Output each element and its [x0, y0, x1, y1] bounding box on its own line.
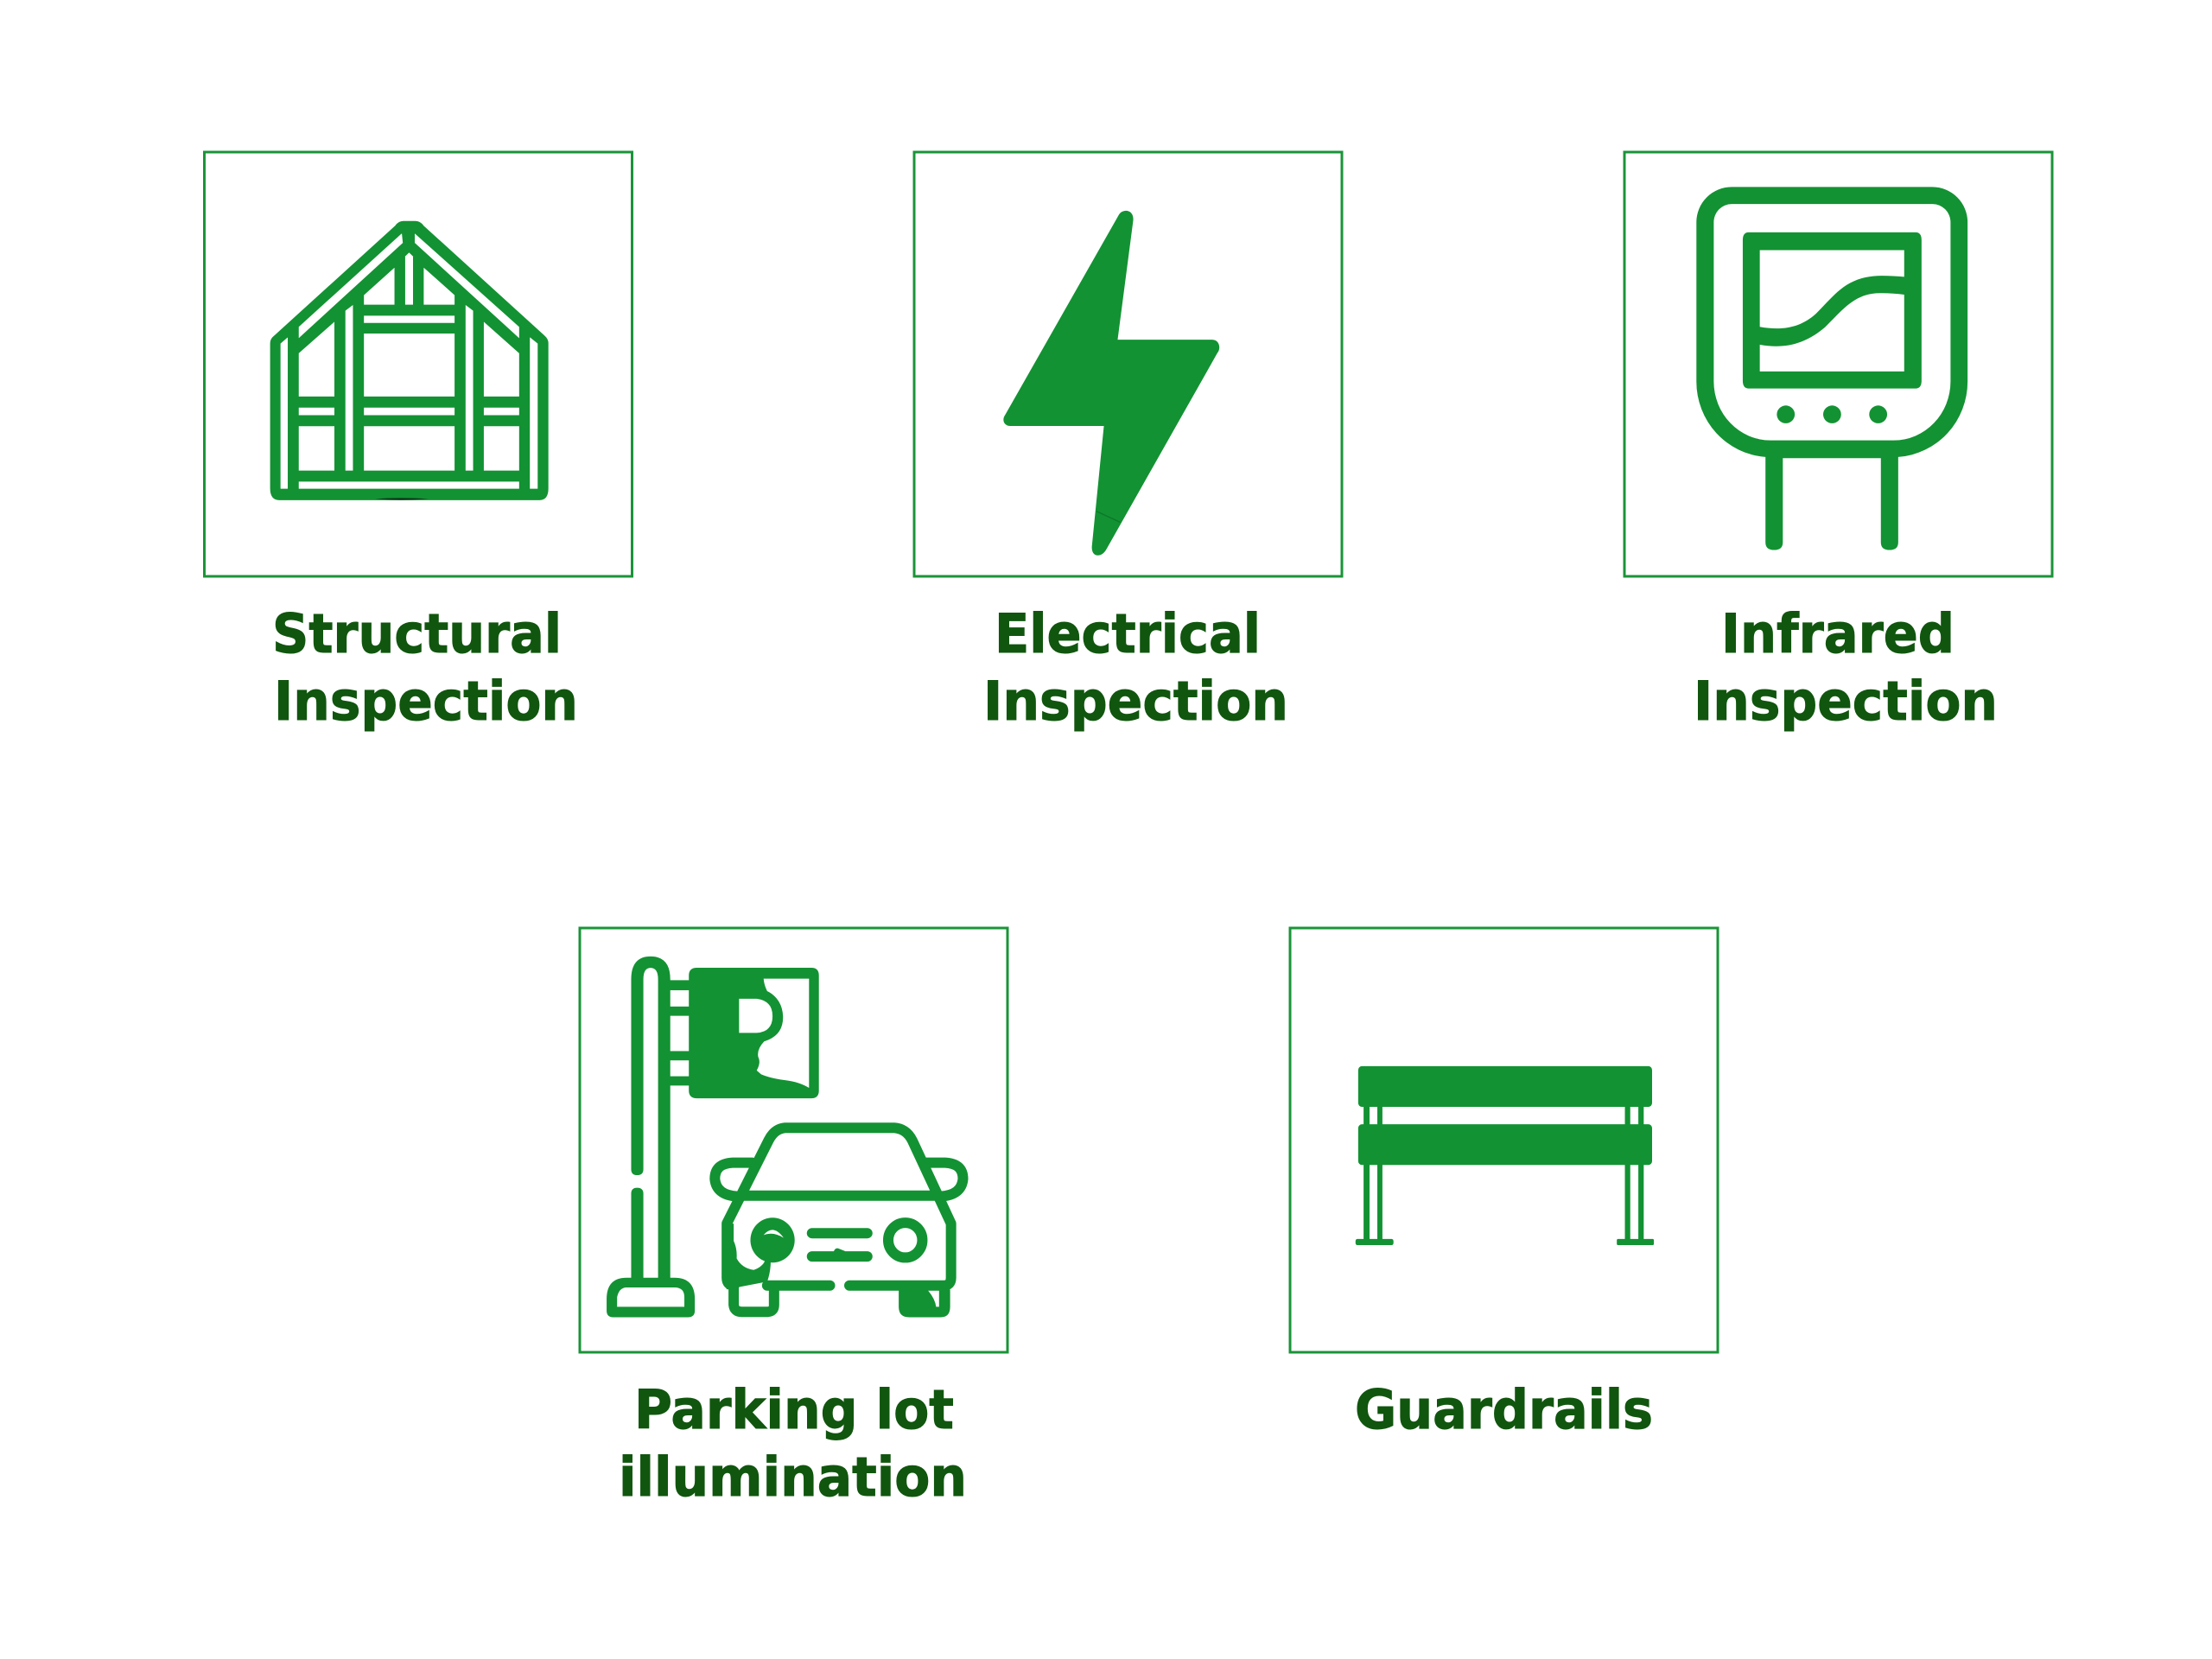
label: Parking lot illumination	[619, 1378, 967, 1509]
label: Infrared Inspection: Inspection	[1694, 670, 1998, 733]
label: Electrical Inspection	[983, 602, 1288, 733]
panel: structural inspection	[204, 152, 632, 733]
icon: parking sign and car	[607, 957, 963, 1317]
panel: infrared inspection	[1624, 152, 2052, 733]
panel: guardrails	[1290, 928, 1718, 1441]
panel: parking lot illumination	[580, 928, 1007, 1509]
label: Structural Inspection: Structural	[272, 602, 562, 665]
label: Structural Inspection	[272, 602, 578, 733]
label: Electrical Inspection: Electrical	[995, 602, 1261, 665]
frame: infrared	[1624, 152, 2052, 576]
label: Structural Inspection: Inspection	[274, 670, 578, 733]
label: Infrared Inspection	[1694, 602, 1998, 733]
panel: electrical inspection	[914, 152, 1342, 733]
label: Infrared Inspection: Infrared	[1721, 602, 1955, 665]
frame: guardrails	[1290, 928, 1718, 1352]
icon: lightning bolt	[1003, 211, 1219, 556]
icon: guardrail	[1356, 1066, 1654, 1245]
label: Parking lot illumination: illumination	[619, 1446, 967, 1509]
icon: infrared monitor	[1696, 187, 1967, 550]
label: Electrical Inspection: Inspection	[983, 670, 1288, 733]
label: Parking lot illumination: Parking lot	[634, 1378, 954, 1441]
frame: electrical	[914, 152, 1342, 576]
frame: structural	[204, 152, 632, 576]
icon: house frame	[271, 222, 548, 500]
label: Guardrails: Guardrails	[1355, 1378, 1653, 1441]
frame: parking	[580, 928, 1007, 1352]
